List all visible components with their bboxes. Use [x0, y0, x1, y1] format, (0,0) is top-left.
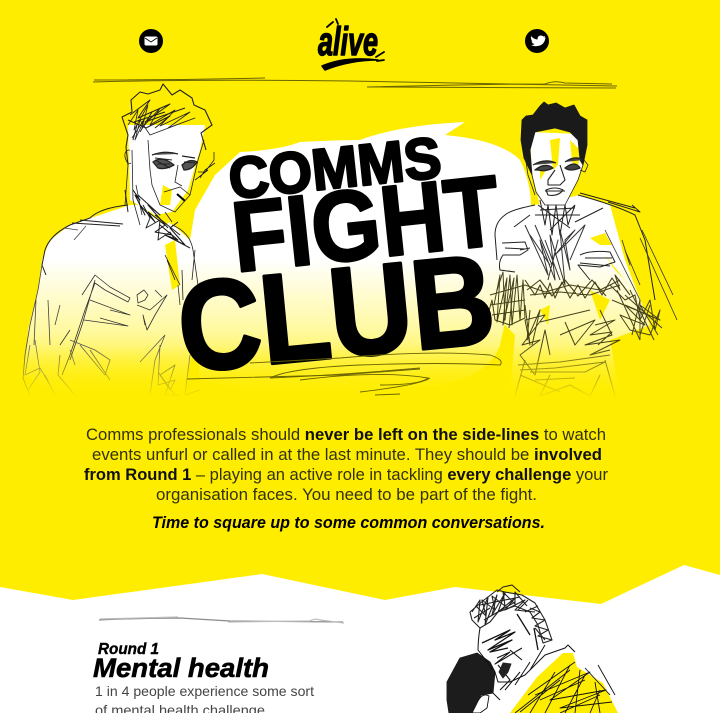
left fighter yellow highlights: [160, 185, 185, 290]
title line: COMMS: COMMS: [226, 125, 444, 212]
round label: Round 1: [98, 641, 159, 658]
jacket hatching: [515, 662, 615, 713]
right fighter yellow patches: [540, 138, 640, 325]
right fighter waist hatching: [525, 275, 630, 298]
intro paragraph: events unfurl or called in at the last minute. They should be involved: [92, 445, 602, 464]
right fighter forearm hatching: [487, 272, 662, 340]
left fighter shoulders and torso: [42, 190, 128, 275]
intro paragraph: from Round 1 – playing an active role in tackling every challenge your: [84, 465, 608, 484]
header logo: alive: [318, 19, 384, 70]
round 1 heading: [93, 641, 269, 683]
title line: CLUB: CLUB: [172, 227, 500, 399]
intro paragraph: [84, 425, 608, 504]
jacket fill: [510, 653, 618, 713]
scribbles under title: [187, 353, 501, 395]
embrace sketch: [447, 585, 618, 713]
sketched rule: round 1: [99, 617, 344, 623]
left fighter sketch: [23, 84, 215, 396]
right fighter face: [533, 158, 583, 171]
ear: [472, 695, 489, 713]
title line: FIGHT: FIGHT: [227, 154, 505, 294]
right fighter hair: [521, 102, 587, 175]
right fighter chest hatching: [525, 225, 585, 285]
header icon: email: [139, 29, 163, 53]
left fighter face: [152, 152, 197, 170]
white brush shape behind title: [190, 122, 531, 392]
header logo: alive: alive: [318, 20, 378, 64]
right fighter neck hatching: [535, 200, 580, 235]
right fighter sketch: [487, 102, 677, 396]
sketched rule under header: [93, 78, 617, 88]
italic call to action: Time to square up to some common conversations.: [152, 513, 545, 532]
fade at base of fighters: [0, 345, 720, 400]
left fighter body fill: [24, 205, 197, 396]
white torn section: [0, 565, 720, 713]
intro paragraph: Comms professionals should never be left on the side-lines to watch: [86, 425, 606, 444]
right fighter face fill: [530, 132, 583, 205]
round 1 body text: 1 in 4 people experience some sort: [95, 683, 314, 699]
left fighter face fill: [128, 125, 205, 215]
intro paragraph: organisation faces. You need to be part of the fight.: [156, 485, 537, 504]
right fighter fists: [499, 242, 530, 272]
hugging head: [447, 653, 495, 713]
man hair: [470, 585, 552, 643]
right fighter shoulders and arms: [495, 193, 655, 300]
title: Comms Fight Club: [172, 125, 505, 399]
round title: Mental health: [93, 653, 269, 683]
right fighter body fill: [490, 195, 650, 396]
round 1 body text: [95, 683, 314, 713]
header icon: twitter: [525, 29, 549, 53]
man face: [482, 614, 538, 652]
left fighter neck hatching: [133, 190, 185, 245]
left fighter hair: [122, 84, 212, 165]
